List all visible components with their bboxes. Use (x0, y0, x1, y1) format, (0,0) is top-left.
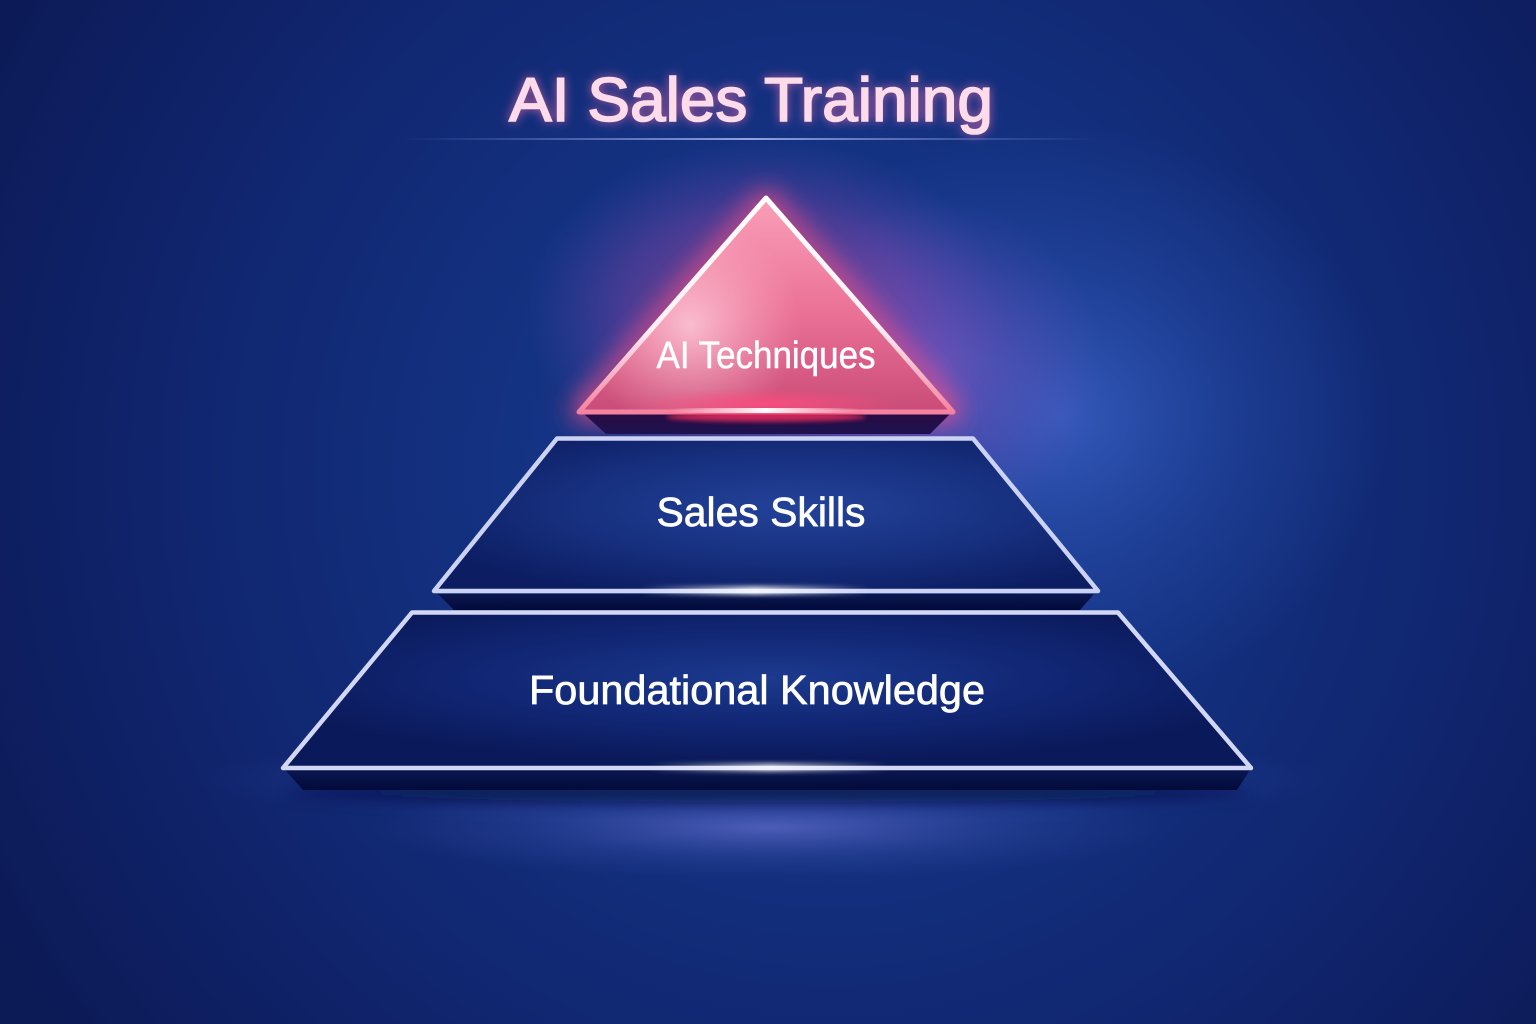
label: Foundational Knowledge: Foundational Knowledge (529, 667, 985, 713)
title: AI Sales Training (509, 66, 993, 135)
label: AI Techniques: AI Techniques (656, 335, 876, 377)
label: Sales Skills: Sales Skills (656, 489, 866, 535)
tier: Sales Skills (434, 438, 1098, 610)
tier: Foundational Knowledge (283, 612, 1251, 790)
tier: AI Techniques (579, 198, 953, 434)
